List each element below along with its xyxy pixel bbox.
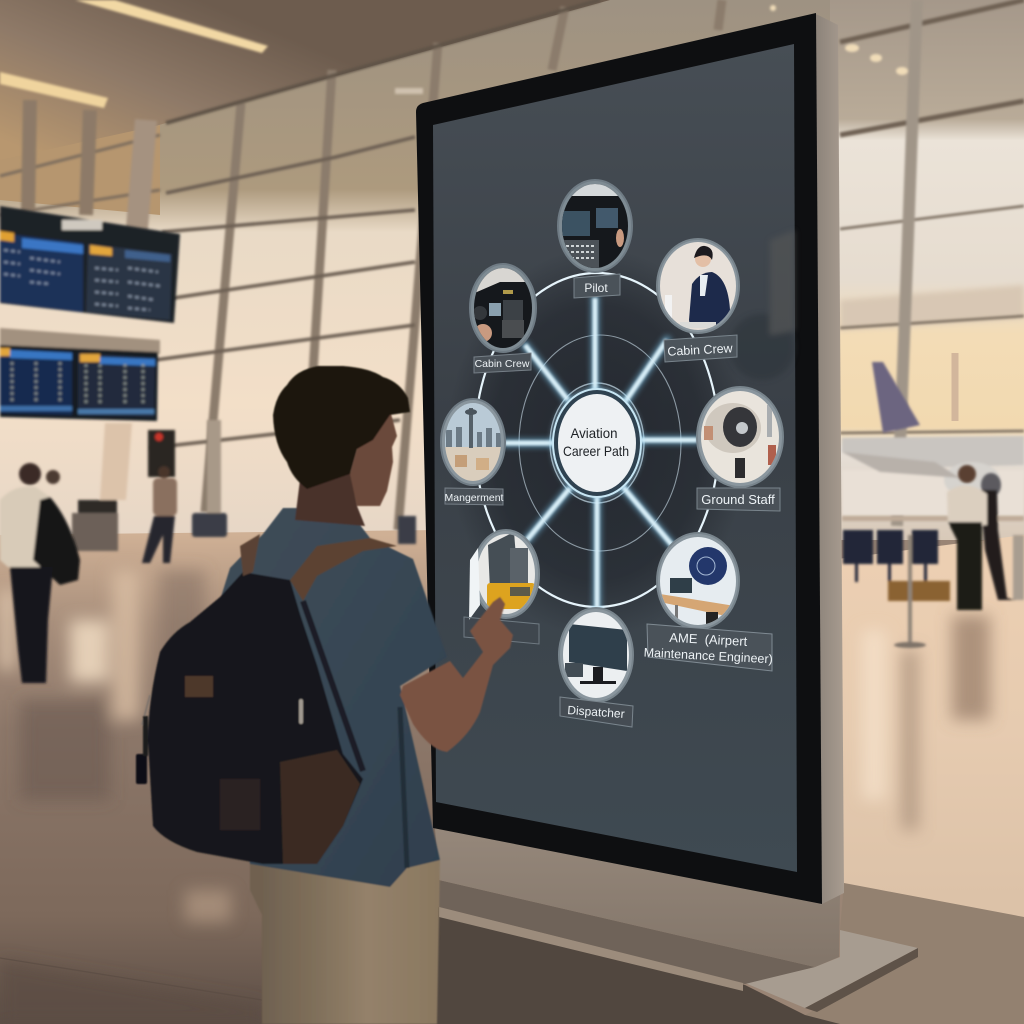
seating (843, 530, 938, 582)
label: Management: Mangerment (445, 492, 504, 504)
label: Cabin Crew right: Cabin Crew (667, 341, 734, 359)
label: Cabin Crew left (474, 353, 531, 373)
lower brown pocket (280, 750, 360, 864)
staff members (947, 465, 1016, 610)
shoulder straps (240, 534, 260, 576)
node: Dispatcher (558, 607, 634, 702)
side pocket (220, 779, 260, 830)
centre hub: Career Path (563, 443, 629, 459)
dark centre vignette (447, 248, 747, 638)
node: Management (440, 399, 506, 487)
label: Dispatcher: Dispatcher (567, 703, 625, 721)
neck (295, 470, 365, 526)
ceiling light strips (0, 0, 423, 108)
ceiling left (0, 0, 610, 170)
node: Cabin Crew right (655, 238, 741, 334)
hub ring glow (551, 387, 643, 499)
kiosk rail (439, 907, 743, 991)
person viewing kiosk (136, 366, 513, 1024)
leather patch (185, 676, 213, 697)
label: blank behind hand (464, 617, 539, 644)
spokes (505, 298, 697, 608)
trousers (250, 860, 440, 1024)
centre hub (553, 389, 641, 497)
floor under kiosk (430, 905, 840, 1024)
upper board (0, 206, 180, 323)
flight information boards (0, 206, 180, 421)
traveller with backpack, far left (0, 463, 80, 683)
distant walker (142, 466, 177, 563)
node: Airport Operations (finger covered) (469, 530, 539, 620)
waiting area and staff, right (842, 465, 1024, 648)
floor right (830, 535, 1024, 925)
arm and pointing hand (400, 597, 513, 752)
airplane outside right window (842, 362, 1024, 516)
far left tan glazing (0, 125, 160, 215)
label: Ground Staff (697, 488, 780, 511)
node: Ground Staff (697, 387, 783, 487)
horizon band (840, 285, 1024, 330)
kiosk foot (745, 930, 918, 1008)
label: Ground Staff: Ground Staff (701, 492, 775, 507)
ceiling lights right (770, 5, 908, 75)
spoke glow (505, 298, 697, 608)
label: Pilot (574, 274, 620, 298)
far concourse details (72, 420, 416, 551)
zipper charm (299, 699, 303, 724)
label: AME (643, 624, 773, 671)
hair (273, 366, 410, 489)
reflection in screen (729, 230, 795, 380)
floor right foreground (790, 883, 1024, 1024)
stanchion (908, 535, 912, 645)
left window mullions (0, 0, 722, 530)
node: AME (655, 533, 741, 630)
lower board (0, 345, 158, 421)
label: Cabin Crew left: Cabin Crew (475, 358, 530, 370)
face (350, 410, 397, 506)
label: Pilot: Pilot (584, 281, 608, 295)
node: Pilot (555, 180, 635, 275)
left window wall (0, 0, 830, 545)
node: Cabin Crew left (470, 264, 536, 355)
right window mullions (840, 0, 1024, 526)
guide rings (475, 273, 719, 607)
label: AME: AME (Airpert (669, 630, 748, 649)
kiosk side panel (814, 13, 844, 905)
career wheel diagram (440, 180, 783, 727)
pillars (100, 423, 132, 500)
distant travellers (0, 463, 177, 683)
label: Cabin Crew right (664, 335, 737, 362)
kiosk bezel (416, 13, 822, 904)
kiosk lower plinth (439, 880, 815, 984)
shirt (220, 508, 447, 887)
label: Dispatcher (560, 697, 633, 727)
right window wall (830, 0, 1024, 540)
seats (192, 513, 227, 537)
kiosk screen (433, 44, 797, 872)
planter (888, 581, 950, 601)
digital kiosk (416, 13, 918, 1012)
key tag (136, 695, 150, 784)
label: AME: Maintenance Engineer) (643, 646, 773, 666)
backpack (136, 534, 407, 868)
support beam (0, 328, 160, 354)
centre hub: Aviation (570, 425, 618, 441)
exit sign panel (148, 430, 175, 477)
floor left (0, 530, 440, 1024)
floor reflections (0, 570, 990, 1024)
lamp post outside (952, 353, 958, 421)
kiosk plinth (435, 828, 840, 967)
desk (72, 500, 118, 551)
